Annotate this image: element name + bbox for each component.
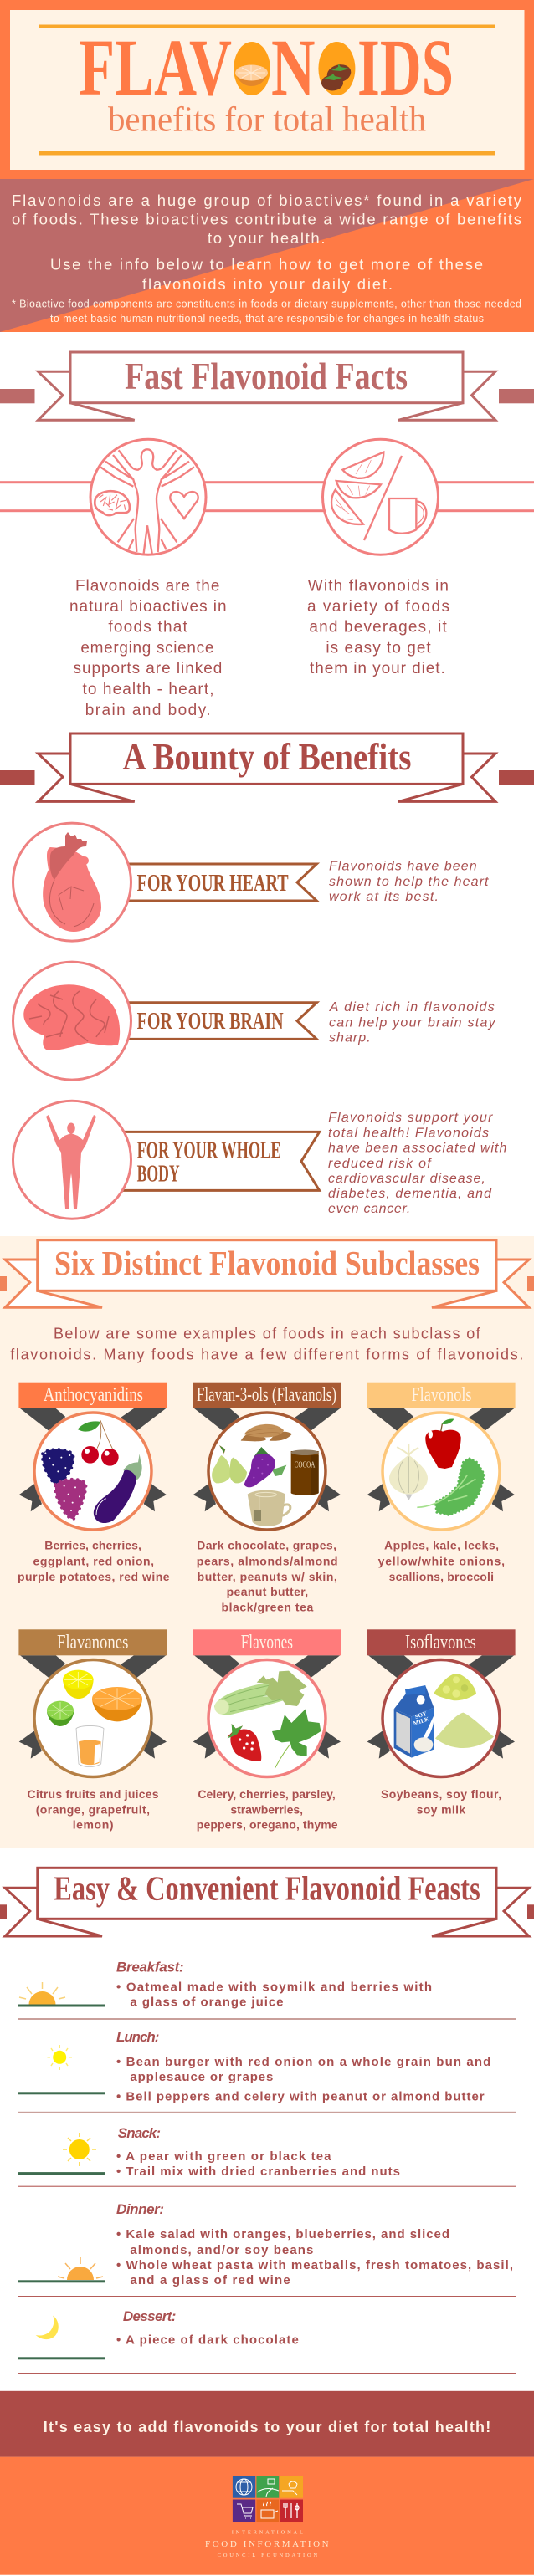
banner: Fast Flavonoid Facts <box>0 352 534 420</box>
text: lunch <box>116 2029 490 2103</box>
text: subclass intro: flavonoids. Many foods have a few different forms of flavonoids. <box>10 1347 523 1363</box>
card: Isoflavones <box>367 1629 516 1816</box>
text: snack: • Trail mix with dried cranberries and nuts <box>116 2165 400 2179</box>
text: Flavones foods: strawberries, <box>230 1802 303 1816</box>
banner: Easy & Convenient Flavonoid Feasts <box>0 1868 534 1936</box>
text: Flavones foods: peppers, oregano, thyme <box>197 1818 338 1832</box>
icon: afternoon sun <box>18 2133 105 2175</box>
text: heart benefit: Flavonoids have been <box>329 860 477 874</box>
text: easy to get in your diet <box>307 578 449 677</box>
logo: wordmark <box>205 2530 329 2558</box>
intro panel: * Bioactive food components are constituents in foods or dietary supplements, other than those needed <box>12 299 521 310</box>
text: lunch: • Bean burger with red onion on a whole grain bun and <box>116 2055 490 2069</box>
text: Anthocyanidins foods: eggplant, red onion, <box>33 1555 154 1568</box>
text: dinner: • Whole wheat pasta with meatballs, fresh tomatoes, basil, <box>116 2258 513 2272</box>
card: Flavanones: Flavanones <box>57 1632 128 1653</box>
text: brain benefit: A diet rich in flavonoids <box>329 1000 495 1015</box>
card: Flavones <box>193 1629 341 1832</box>
icon: setting sun <box>18 2257 105 2282</box>
intro panel: flavonoids into your daily diet. <box>142 275 393 293</box>
text: linked to health: supports are linked <box>74 660 222 677</box>
icon: heart <box>13 823 131 941</box>
text: brain benefit <box>329 1000 496 1045</box>
text: Flavanones foods: Citrus fruits and juices <box>27 1787 159 1801</box>
text: heart benefit: work at its best. <box>329 890 439 904</box>
text: breakfast: a glass of orange juice <box>130 1995 283 2009</box>
text: Flavones foods: Celery, cherries, parsley, <box>198 1787 336 1801</box>
text: Isoflavones foods: soy milk <box>417 1802 465 1816</box>
text: whole body benefit: reduced risk of <box>328 1157 432 1171</box>
meal: lunch <box>18 2029 490 2103</box>
text: Flavonols foods: yellow/white onions, <box>378 1555 505 1568</box>
icon: almonds, pears, grapes, cocoa, tea: COCOA <box>295 1461 316 1470</box>
icon: soy milk, soybeans, soy flour: SOY <box>414 1710 428 1720</box>
text: easy to get in your diet: a variety of foods <box>307 598 449 616</box>
banner: Six Distinct Flavonoid Subclasses: Six Distinct Flavonoid Subclasses <box>54 1244 480 1282</box>
icon: brain <box>13 962 131 1080</box>
text: Flavonols foods: Apples, kale, leeks, <box>384 1539 499 1552</box>
text: Flavonols foods <box>378 1539 505 1583</box>
icon: citrus and juice <box>47 1670 142 1766</box>
logo: wordmark: FOOD INFORMATION <box>205 2539 329 2549</box>
text: whole body benefit: cardiovascular disease, <box>328 1172 485 1186</box>
ribbon: for your heart <box>126 864 316 901</box>
icon: rising sun <box>18 1982 105 2007</box>
title: FLAV <box>79 23 232 112</box>
text: dinner: almonds, and/or soy beans <box>130 2243 313 2257</box>
text: Flavanones foods: lemon) <box>73 1818 114 1832</box>
text: Flavan-3-ols foods: butter, peanuts w/ skin, <box>198 1570 337 1583</box>
header panel <box>0 0 534 180</box>
text: linked to health: natural bioactives in <box>69 598 227 616</box>
text: whole body benefit: diabetes, dementia, and <box>328 1187 492 1201</box>
icon: fruit slices and mug <box>323 439 439 555</box>
icon: body, brain and heart <box>90 439 206 555</box>
benefit: brain <box>13 962 496 1080</box>
card: Flavonols <box>367 1383 516 1583</box>
icon: midday sun <box>18 2045 105 2094</box>
subtitle: benefits for total health <box>108 101 426 140</box>
text: lunch: applesauce or grapes <box>130 2070 273 2084</box>
card: Flavones: Flavones <box>241 1632 293 1653</box>
ribbon: for your brain <box>126 1003 316 1039</box>
banner: A Bounty of Benefits: A Bounty of Benefits <box>122 736 412 778</box>
text: whole body benefit: even cancer. <box>328 1202 410 1216</box>
text: Flavones foods <box>197 1787 338 1832</box>
icon: soy milk, soybeans, soy flour: MILK <box>413 1715 430 1727</box>
card: Flavanones <box>18 1629 167 1832</box>
text: linked to health: Flavonoids are the <box>75 578 219 595</box>
meal: dessert <box>18 2308 299 2359</box>
text: Isoflavones foods: Soybeans, soy flour, <box>381 1787 501 1801</box>
text: whole body benefit: Flavonoids support your <box>328 1111 493 1125</box>
text: Isoflavones foods <box>381 1787 501 1816</box>
intro panel: Use the info below to learn how to get more of these <box>50 256 483 273</box>
intro panel <box>0 179 534 332</box>
ribbon: for your heart: FOR YOUR HEART <box>137 871 289 897</box>
ribbon: for your whole body <box>122 1132 320 1190</box>
text: whole body benefit: have been associated with <box>328 1141 506 1156</box>
text: lunch: • Bell peppers and celery with peanut or almond butter <box>116 2089 485 2103</box>
meal: dinner <box>18 2201 513 2287</box>
card: Anthocyanidins: Anthocyanidins <box>44 1384 143 1406</box>
text: dinner: • Kale salad with oranges, blueberries, and sliced <box>116 2227 449 2241</box>
text: breakfast: • Oatmeal made with soymilk and berries with <box>116 1981 432 1995</box>
text: linked to health <box>69 578 227 719</box>
title: IDS <box>357 23 454 112</box>
text: heart benefit <box>329 860 489 904</box>
text: Flavan-3-ols foods: peanut butter, <box>227 1585 308 1598</box>
text: Flavan-3-ols foods <box>197 1539 338 1614</box>
text: breakfast: Breakfast: <box>116 1959 184 1975</box>
icon: body <box>13 1101 131 1219</box>
title: N <box>271 23 315 112</box>
text: Flavonols foods: scallions, broccoli <box>389 1570 494 1583</box>
text: dessert: Dessert: <box>123 2308 176 2324</box>
logo: wordmark: INTERNATIONAL <box>232 2530 303 2536</box>
text: easy to get in your diet: is easy to get <box>326 640 431 657</box>
icon: apple, onion, kale <box>389 1419 485 1515</box>
text: easy to get in your diet: them in your diet. <box>310 660 445 677</box>
intro panel: to your health. <box>208 229 325 247</box>
card: Anthocyanidins <box>18 1383 170 1583</box>
text: breakfast <box>116 1959 432 2009</box>
card: Flavan-3-ols <box>193 1383 341 1614</box>
text: linked to health: brain and body. <box>85 702 211 719</box>
logo: wordmark: COUNCIL FOUNDATION <box>218 2553 317 2558</box>
text: linked to health: to health - heart, <box>82 681 214 698</box>
benefit: whole body <box>13 1101 506 1219</box>
text: Anthocyanidins foods: purple potatoes, red wine <box>18 1570 170 1583</box>
text: dessert <box>116 2308 299 2347</box>
icon: celery, strawberry, parsley <box>214 1671 321 1768</box>
logo: tiles <box>233 2476 303 2522</box>
closing banner <box>0 2391 534 2457</box>
text: Anthocyanidins foods: Berries, cherries, <box>44 1539 141 1552</box>
banner: A Bounty of Benefits <box>0 733 534 801</box>
text: Flavan-3-ols foods: black/green tea <box>221 1601 314 1614</box>
text: dessert: • A piece of dark chocolate <box>116 2333 299 2347</box>
text: Flavan-3-ols foods: pears, almonds/almond <box>197 1555 338 1568</box>
icon: cherries, berries, eggplant <box>43 1420 142 1523</box>
text: dinner: and a glass of red wine <box>130 2273 290 2287</box>
text: easy to get in your diet: With flavonoids in <box>308 578 449 595</box>
text: lunch: Lunch: <box>116 2029 159 2045</box>
text: whole body benefit <box>328 1111 506 1216</box>
panel: six subclasses <box>0 1236 534 1848</box>
intro panel: of foods. These bioactives contribute a wide range of benefits <box>12 210 521 227</box>
intro panel: Flavonoids are a huge group of bioactives* found in a variety <box>12 192 522 209</box>
text: Flavanones foods: (orange, grapefruit, <box>36 1802 150 1816</box>
text: brain benefit: can help your brain stay <box>329 1015 496 1030</box>
footer <box>0 2457 534 2575</box>
text: dinner <box>116 2201 513 2287</box>
text: snack: • A pear with green or black tea <box>116 2149 331 2164</box>
banner: Fast Flavonoid Facts: Fast Flavonoid Facts <box>125 355 408 397</box>
meal: breakfast <box>18 1959 432 2009</box>
icon: soy milk, soybeans, soy flour <box>394 1674 494 1758</box>
text: whole body benefit: total health! Flavonoids <box>328 1126 489 1141</box>
banner: Six Distinct Flavonoid Subclasses <box>0 1240 534 1307</box>
text: Flavanones foods <box>27 1787 159 1832</box>
card: Isoflavones: Isoflavones <box>405 1632 476 1653</box>
benefit: heart <box>13 823 489 941</box>
facts connector lines <box>0 481 534 512</box>
text: heart benefit: shown to help the heart <box>329 875 489 889</box>
ribbon: for your brain: FOR YOUR BRAIN <box>137 1009 284 1035</box>
intro panel: to meet basic human nutritional needs, that are responsible for changes in health status <box>50 313 484 325</box>
text: subclass intro: Below are some examples of foods in each subclass of <box>54 1326 481 1342</box>
ribbon: for your whole body: FOR YOUR WHOLE <box>137 1137 281 1163</box>
text: Flavan-3-ols foods: Dark chocolate, grapes, <box>197 1539 336 1552</box>
card: Flavonols: Flavonols <box>412 1384 472 1406</box>
text: snack: Snack: <box>118 2125 161 2141</box>
closing banner: It's easy to add flavonoids to your diet for total health! <box>44 2419 490 2435</box>
ribbon: for your whole body: BODY <box>137 1162 180 1188</box>
text: linked to health: foods that <box>108 619 188 636</box>
title <box>79 23 454 112</box>
icon: almonds, pears, grapes, cocoa, tea <box>212 1424 319 1526</box>
meal: snack <box>18 2125 400 2179</box>
card: Flavan-3-ols: Flavan-3-ols (Flavanols) <box>197 1384 336 1406</box>
text: snack <box>116 2125 400 2179</box>
text: linked to health: emerging science <box>80 640 213 657</box>
text: Anthocyanidins foods <box>18 1539 170 1583</box>
text: subclass intro <box>10 1326 523 1363</box>
text: easy to get in your diet: and beverages, it <box>309 619 448 636</box>
text: dinner: Dinner: <box>116 2201 164 2217</box>
text: brain benefit: sharp. <box>329 1030 371 1045</box>
icon: moon <box>18 2316 105 2359</box>
